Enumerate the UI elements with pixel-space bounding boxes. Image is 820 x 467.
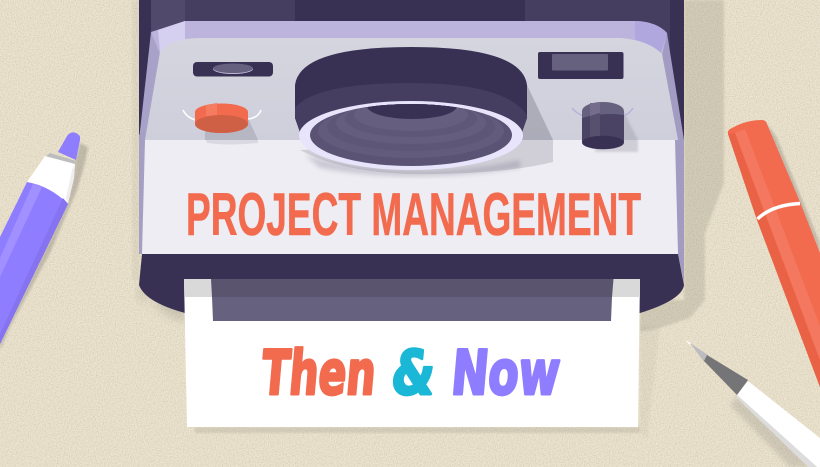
lens shadow — [300, 85, 553, 176]
switch slot — [193, 62, 273, 76]
marker white grip — [27, 156, 75, 203]
subtitle: & — [389, 338, 438, 409]
dial knob — [572, 102, 638, 152]
camera side trim — [139, 32, 165, 254]
subtitle: Then — [259, 338, 379, 409]
red shutter button — [183, 103, 261, 144]
camera deck — [145, 38, 678, 140]
pencil shadow — [730, 397, 820, 467]
subtitle — [259, 338, 563, 409]
camera lid top band — [151, 21, 667, 56]
photo top corners — [184, 279, 212, 297]
pencil lead — [685, 340, 691, 345]
pen highlight — [735, 129, 820, 385]
photo sheet — [184, 279, 640, 427]
subtitle: Now — [449, 338, 563, 409]
pencil — [685, 340, 820, 467]
marker shadow — [0, 143, 88, 350]
marker barrel — [0, 182, 68, 344]
marker tip — [58, 132, 80, 160]
camera back panel — [139, 0, 684, 140]
viewfinder — [538, 52, 624, 79]
pen white band — [758, 204, 800, 219]
pencil cone — [704, 355, 748, 395]
camera slot shadow — [211, 279, 614, 297]
marker collar — [45, 153, 76, 165]
pen barrel — [728, 120, 820, 387]
camera drop shadow — [132, 0, 724, 440]
camera — [139, 0, 684, 313]
lens glass — [299, 101, 523, 170]
pencil body — [737, 381, 820, 467]
pen shadow — [765, 122, 820, 275]
printed photo — [184, 279, 640, 427]
red pen — [728, 120, 820, 387]
purple marker — [0, 132, 88, 350]
camera front face — [142, 140, 678, 254]
camera base — [139, 254, 684, 313]
pencil ferrule — [690, 343, 708, 362]
lens barrel — [295, 47, 527, 138]
